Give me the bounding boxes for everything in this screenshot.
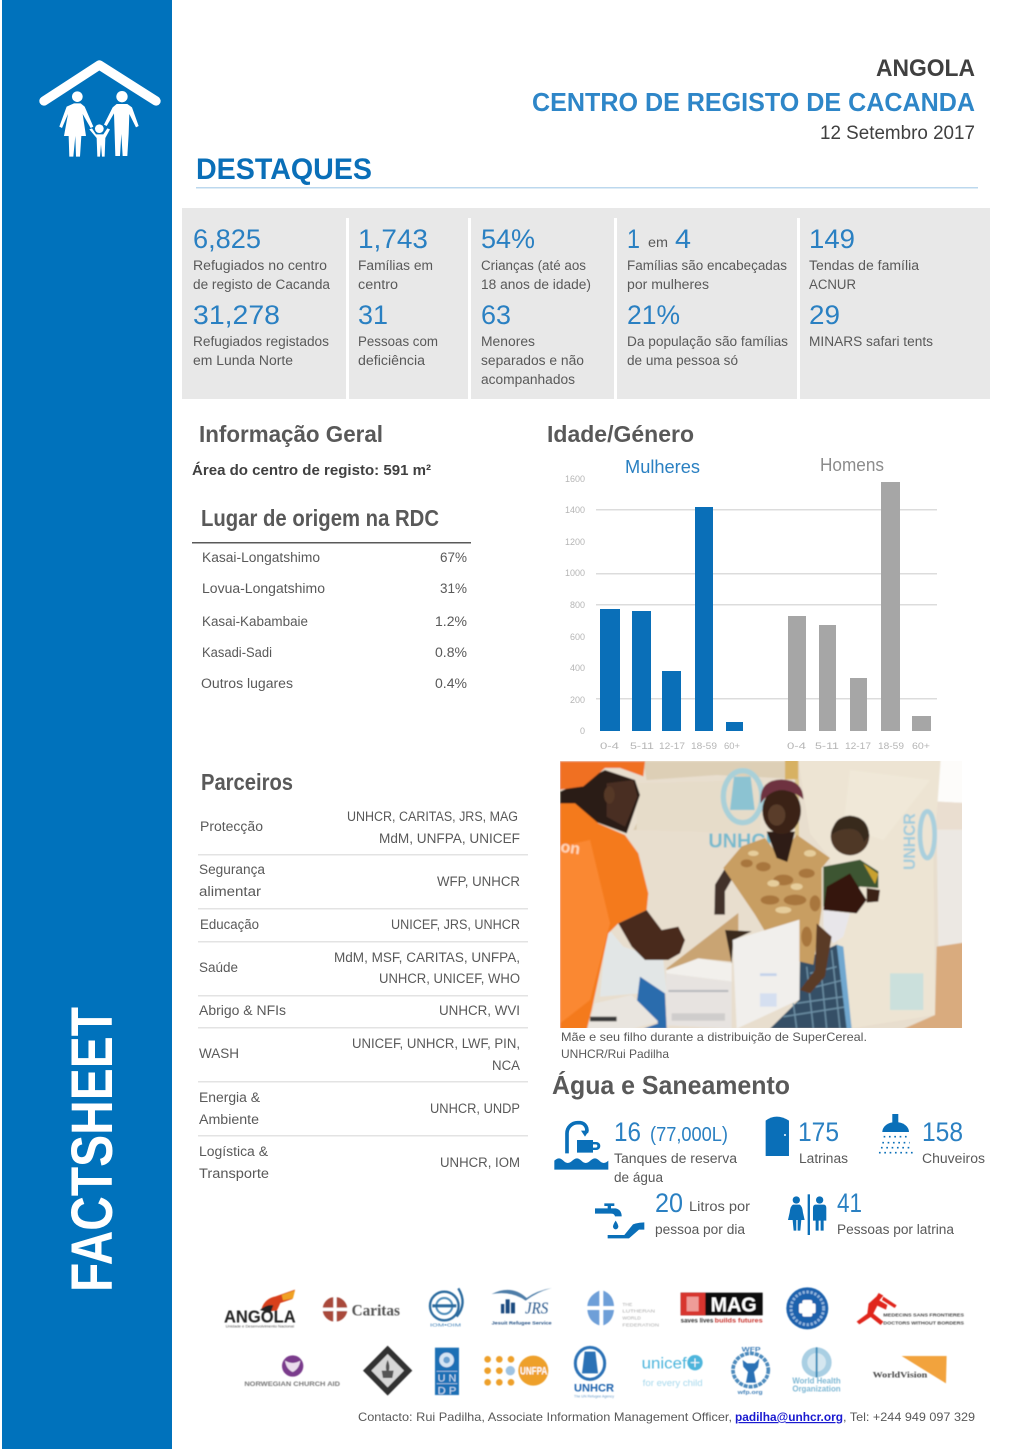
sky, back tent, wall and ground at right [933, 760, 970, 803]
legend: women: Mulheres [625, 457, 700, 477]
heading: Lugar de origem na RDC [201, 505, 439, 531]
worker cap [560, 761, 645, 790]
highlight column 4 [627, 224, 788, 368]
logos: right part of both rows [574, 1287, 965, 1398]
highlight column 3: separados e não [481, 353, 584, 368]
stat: litres per person per day [595, 1188, 751, 1238]
highlight column 1: Refugiados no centro [193, 258, 327, 273]
logo: UNFPA: UNFPA [520, 1366, 548, 1378]
panel: highlights [182, 208, 990, 399]
logo: MSF [857, 1293, 965, 1326]
photo: mother and child at SuperCereal distribution: UNHCR [900, 813, 919, 870]
title block [532, 55, 975, 144]
highlight column 2: centro [358, 277, 398, 292]
table: partners: UNHCR, UNDP [430, 1101, 520, 1116]
table: partners: UNHCR, WVI [439, 1003, 520, 1018]
table: partners: UNICEF, UNHCR, LWF, PIN, [352, 1036, 520, 1051]
highlight column 5: Tendas de família [809, 258, 920, 273]
table: place of origin in DRC: Kasai-Longatshimo [202, 550, 320, 565]
logo: UNDP [435, 1348, 459, 1397]
table: place of origin in DRC: 0.4% [435, 676, 467, 691]
x axis labels: 12-17 [659, 741, 685, 751]
highlight column 1: Refugiados registados [193, 334, 329, 349]
logo: UNDP: D P [438, 1386, 457, 1397]
stat: litres per person per day: Litros por [689, 1199, 751, 1214]
stat: latrines: 175 [798, 1117, 839, 1147]
highlight column 3: Menores [481, 334, 535, 349]
bars: women [600, 507, 743, 731]
highlight column 4: de uma pessoa só [627, 353, 738, 368]
photo caption [561, 1030, 867, 1061]
table: partners: Ambiente [199, 1112, 259, 1127]
heading: DESTAQUES: DESTAQUES [196, 153, 372, 186]
contact line: , Tel: +244 949 097 329 [843, 1410, 975, 1424]
logo: World Vision: WorldVision [873, 1370, 928, 1380]
panel: general information [192, 421, 431, 479]
stat: showers: 158 [922, 1117, 963, 1147]
table: partners: alimentar [199, 884, 262, 899]
highlight column 2 [358, 224, 438, 368]
stat: litres per person per day: pessoa por dia [655, 1222, 745, 1237]
photo: mother and child at SuperCereal distribution [550, 760, 970, 1033]
stat: water tanks [554, 1117, 738, 1185]
table: partners: Abrigo & NFIs [199, 1003, 286, 1018]
highlight column 4: 1 [627, 224, 640, 254]
legend: men: Homens [820, 455, 884, 475]
logo: UNHCR: The UN Refugee Agency [574, 1393, 614, 1398]
UNHCR tent marks [723, 771, 762, 823]
x axis labels: 18-59 [878, 741, 904, 751]
contact line: Contacto: Rui Padilha, Associate Information Management Officer, [358, 1410, 732, 1424]
logo: UNDP: U N [438, 1374, 456, 1385]
highlight column 5: MINARS safari tents [809, 334, 933, 349]
child [831, 817, 869, 855]
highlight column 2: deficiência [358, 353, 426, 368]
logo: World Vision [873, 1356, 947, 1383]
table: partners: NCA [492, 1058, 520, 1073]
table: partners: Energia & [199, 1090, 260, 1105]
logo: WHO: Organization [792, 1385, 841, 1394]
logo: Lutheran World Federation [587, 1291, 659, 1329]
right tent sheet [798, 760, 941, 1028]
logo: MAG [681, 1293, 763, 1325]
x axis labels: 60+ [912, 741, 930, 751]
photo: mother and child at SuperCereal distribution: on [559, 839, 581, 858]
stat: water tanks: (77,000L) [650, 1124, 728, 1146]
logo: MAG: MAG [711, 1295, 757, 1317]
logo: MSF: DOCTORS WITHOUT BORDERS [883, 1320, 965, 1326]
y axis labels: 1200 [565, 537, 585, 547]
table: place of origin in DRC: 0.8% [435, 645, 467, 660]
highlight column 4: em [648, 235, 668, 250]
table: partners: WFP, UNHCR [437, 874, 520, 889]
stat: water tanks: 16 [614, 1117, 641, 1147]
highlight column 4: 4 [675, 224, 691, 254]
photo caption: Mãe e seu filho durante a distribuição de SuperCereal. [561, 1030, 867, 1044]
highlight column 1 [193, 224, 330, 368]
centre name: CENTRO DE REGISTO DE CACANDA [532, 87, 975, 117]
orange shirt [560, 803, 648, 1030]
highlight column 4: Da população são famílias [627, 334, 788, 349]
stat: showers: Chuveiros [922, 1151, 985, 1166]
x axis labels: 60+ [724, 741, 740, 751]
woman arm [714, 868, 733, 915]
logo: MAG: saves lives [681, 1318, 714, 1325]
stat: people per latrine [788, 1188, 954, 1237]
highlight column 4: 21% [627, 300, 680, 330]
y axis labels: 400 [570, 663, 585, 673]
table: place of origin in DRC: Kasadi-Sadi [202, 645, 272, 660]
x axis labels [600, 741, 930, 751]
table: place of origin in DRC: Lovua-Longatshimo [202, 581, 325, 596]
highlight column 1: em Lunda Norte [193, 353, 293, 368]
table: place of origin in DRC: 31% [440, 581, 467, 596]
woman neck and head [767, 832, 795, 862]
icon: shower head [879, 1114, 913, 1153]
table: partners: UNICEF, JRS, UNHCR [391, 917, 520, 932]
heading: Informação Geral [199, 421, 383, 447]
logo: WHO: World Health [792, 1376, 841, 1385]
logo: MSF: MEDECINS SANS FRONTIERES [883, 1313, 965, 1319]
logo: JRS: Jesuit Refugee Service [492, 1320, 552, 1325]
highlight column 1: 6,825 [193, 224, 261, 254]
highlight column 2: Pessoas com [358, 334, 438, 349]
table: place of origin in DRC: Outros lugares [201, 676, 293, 691]
logo: Norwegian Church Aid [244, 1355, 340, 1388]
logo: UNICEF: for every child [643, 1378, 703, 1388]
stat: people per latrine: Pessoas por latrina [837, 1222, 954, 1237]
sidebar label: FACTSHEET: FACTSHEET [60, 1007, 125, 1292]
table: partners: Saúde [199, 960, 238, 975]
logo: WFP: wfp.org [736, 1390, 763, 1396]
photo caption: UNHCR/Rui Padilha [561, 1047, 669, 1061]
chart: age and gender [547, 421, 937, 751]
icon: family under roof logo [44, 65, 156, 157]
bars: men [788, 482, 931, 731]
worker head and neck [560, 770, 640, 833]
highlight column 4: Famílias são encabeçadas [627, 258, 787, 273]
y axis labels: 0 [580, 726, 585, 736]
y axis labels: 1400 [565, 505, 585, 515]
date: 12 Setembro 2017 [820, 123, 975, 144]
table: partners: Transporte [199, 1166, 269, 1181]
stat: latrines: Latrinas [799, 1151, 848, 1166]
highlight column 3: Crianças (até aos [481, 258, 586, 273]
highlight column 3: 63 [481, 300, 511, 330]
y axis labels: 1000 [565, 568, 585, 578]
x axis labels: 0-4 [600, 741, 619, 751]
logo: Norwegian Church Aid: NORWEGIAN CHURCH AID [244, 1381, 340, 1388]
woman skirt [770, 945, 852, 1029]
logo: MAG: builds futures [715, 1318, 763, 1325]
highlight column 2: 1,743 [358, 224, 428, 254]
icon: latrine door [766, 1117, 789, 1156]
highlight column 3: 18 anos de idade) [481, 277, 591, 292]
x axis labels: 5-11 [630, 741, 654, 751]
table: partners: Educação [200, 917, 259, 932]
heading: Água e Saneamento [552, 1070, 790, 1100]
logo: UNHCR: UNHCR [574, 1383, 614, 1395]
y axis labels: 1600 [565, 474, 585, 484]
woman top [723, 835, 830, 965]
stat: people per latrine: 41 [837, 1188, 862, 1218]
y axis labels: 200 [570, 695, 585, 705]
logo: Caritas: Caritas [352, 1303, 400, 1320]
highlight column 1: de registo de Cacanda [193, 277, 330, 292]
logo: Lutheran World Federation: LUTHERAN [622, 1309, 655, 1315]
contact line [358, 1410, 975, 1424]
highlight column 5 [809, 224, 933, 349]
heading: Idade/Género [547, 421, 694, 447]
logo: WFP: WFP [742, 1348, 761, 1354]
table: partners: WASH [199, 1046, 239, 1061]
highlight column 5: 29 [809, 300, 840, 330]
stat: latrines [766, 1117, 848, 1166]
icon: water tank tap [554, 1123, 608, 1170]
highlight column 2: 31 [358, 300, 388, 330]
stat: litres per person per day: 20 [655, 1188, 683, 1218]
logo: Angola government: ANGOLA [224, 1306, 296, 1326]
email: padilha@unhcr.org [735, 1410, 843, 1424]
table: partners: UNHCR, CARITAS, JRS, MAG [347, 809, 518, 824]
x axis labels: 5-11 [815, 741, 839, 751]
logo: WHO [792, 1347, 841, 1394]
left tent tan folds [643, 762, 787, 780]
logo: Lutheran World Federation: THE [622, 1302, 633, 1308]
highlight column 3: 54% [481, 224, 535, 254]
table: place of origin in DRC: 67% [440, 550, 467, 565]
logo: UNICEF: unicef [642, 1355, 687, 1372]
table and paperwork [600, 927, 667, 997]
logo: Angola government: Unidade e Desenvolvimento Nacional [226, 1324, 294, 1329]
table: partners: UNHCR, IOM [440, 1155, 520, 1170]
logo: Lutheran World Federation: FEDERATION [622, 1323, 659, 1329]
logo: Médicos del Mundo [786, 1287, 828, 1329]
partner logos [224, 1287, 965, 1398]
logo: WFP [733, 1348, 768, 1396]
table: partners: Logística & [199, 1144, 268, 1159]
highlight column 5: 149 [809, 224, 855, 254]
worker arm [618, 910, 685, 960]
tent pole [785, 760, 798, 779]
stat: water tanks: Tanques de reserva [614, 1151, 738, 1166]
logo: UNICEF [642, 1355, 703, 1388]
table: partners: Protecção [200, 819, 263, 834]
cardboard box [667, 913, 738, 970]
highlight column 4: por mulheres [627, 277, 709, 292]
logo: IOM [430, 1288, 463, 1329]
x axis labels: 0-4 [787, 741, 806, 751]
logo: JRS [492, 1288, 552, 1325]
logo: Lutheran World Federation: WORLD [622, 1315, 641, 1321]
table: partners [198, 769, 528, 1181]
logo: JRS: JRS [525, 1298, 549, 1317]
table: place of origin in DRC: 1.2% [435, 614, 467, 629]
photo: mother and child at SuperCereal distribution: UNHCR [708, 829, 780, 852]
y axis labels: 800 [570, 600, 585, 610]
highlight column 1: 31,278 [193, 300, 280, 330]
logo: Angola government [224, 1290, 296, 1329]
logo: IOM: IOM•OIM [430, 1323, 461, 1329]
stat: water tanks: de água [614, 1170, 663, 1185]
y axis labels: 600 [570, 632, 585, 642]
heading: Parceiros [201, 769, 293, 795]
table: place of origin in DRC: Kasai-Kabambaie [202, 614, 308, 629]
highlight column 5: ACNUR [809, 277, 856, 292]
highlight column 2: Famílias em [358, 258, 433, 273]
highlight column 3 [481, 224, 591, 387]
logo: diamond emblem [363, 1346, 412, 1396]
logo: UNHCR [574, 1347, 614, 1398]
y axis labels [565, 474, 585, 736]
site area: Área do centro de registo: 591 m² [192, 462, 431, 479]
logos: left part of both rows [224, 1288, 552, 1397]
table: partners: UNHCR, UNICEF, WHO [379, 971, 520, 986]
stat: showers [879, 1114, 985, 1166]
table: partners: MdM, UNFPA, UNICEF [379, 831, 520, 846]
logo: Caritas [322, 1296, 400, 1323]
panel: water and sanitation [552, 1070, 985, 1238]
panel: blue sidebar [2, 0, 172, 1449]
x axis labels: 12-17 [845, 741, 871, 751]
table: partners: Segurança [199, 862, 265, 877]
country: ANGOLA [876, 55, 975, 82]
table: partners: MdM, MSF, CARITAS, UNFPA, [334, 950, 520, 965]
highlight column 3: acompanhados [481, 372, 575, 387]
table: place of origin in DRC [192, 505, 471, 691]
logo: UNFPA [484, 1356, 548, 1386]
icon: woman and man [788, 1194, 826, 1235]
x axis labels: 18-59 [691, 741, 717, 751]
icon: tap and hand [595, 1203, 644, 1238]
